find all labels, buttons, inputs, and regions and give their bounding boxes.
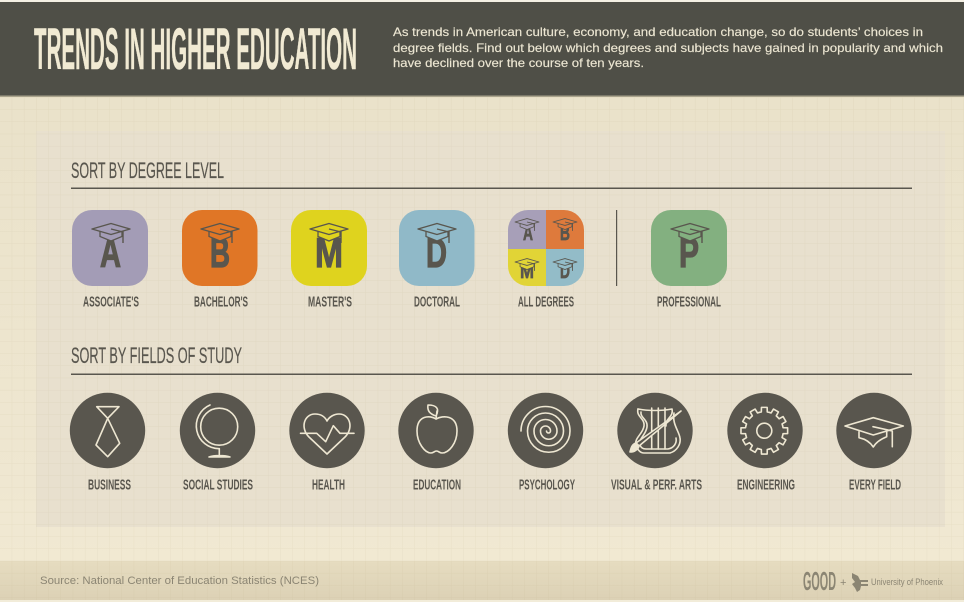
intro text bbox=[393, 26, 943, 70]
field: education (apple icon): EDUCATION bbox=[413, 478, 461, 494]
logos: + bbox=[840, 577, 846, 589]
field: every field (graduation cap icon) bbox=[836, 393, 912, 494]
intro text: have declined over the course of ten years. bbox=[393, 57, 644, 70]
tile: associate's: ASSOCIATE'S bbox=[83, 294, 139, 310]
tile: all degrees: B bbox=[560, 222, 570, 245]
tile: all degrees: M bbox=[520, 260, 534, 283]
field: psychology (spiral icon) bbox=[508, 393, 583, 494]
heading: sort by degree level: SORT BY DEGREE LEVEL bbox=[71, 158, 224, 183]
tile: all degrees: A bbox=[523, 222, 533, 245]
field: social studies (globe icon) bbox=[180, 393, 255, 494]
field: every field (graduation cap icon): EVERY FIELD bbox=[849, 478, 901, 494]
field: visual and performing arts (lyre and brush icon): VISUAL & PERF. ARTS bbox=[611, 478, 702, 494]
tile: bachelor's bbox=[182, 210, 258, 310]
footer band bbox=[0, 561, 964, 602]
field: business (tie icon): BUSINESS bbox=[88, 478, 131, 494]
field: health (heart icon) bbox=[289, 393, 365, 494]
field: social studies (globe icon): SOCIAL STUDIES bbox=[183, 478, 253, 494]
logos: University of Phoenix bbox=[871, 577, 943, 587]
intro text: degree fields. Find out below which degrees and subjects have gained in popularity and which bbox=[393, 42, 943, 55]
tile: doctoral bbox=[399, 210, 474, 310]
header band: TRENDS IN HIGHER EDUCATION bbox=[34, 17, 357, 82]
tile: professional: PROFESSIONAL bbox=[657, 294, 721, 310]
tile: all degrees bbox=[508, 210, 584, 310]
field: business (tie icon) bbox=[70, 393, 145, 494]
tile: professional bbox=[651, 210, 727, 310]
field: engineering (gear icon) bbox=[727, 393, 803, 494]
field: education (apple icon) bbox=[398, 393, 474, 494]
logos: GOOD bbox=[803, 566, 836, 596]
tile: master's bbox=[291, 210, 367, 310]
heading: sort by fields of study: SORT BY FIELDS OF STUDY bbox=[71, 343, 242, 368]
header band bbox=[0, 0, 964, 97]
tile: master's: M bbox=[315, 229, 343, 276]
field: psychology (spiral icon): PSYCHOLOGY bbox=[519, 478, 575, 494]
tile: master's: MASTER'S bbox=[308, 294, 352, 310]
source text: Source: National Center of Education Statistics (NCES) bbox=[40, 575, 319, 587]
intro text: As trends in American culture, economy, and education change, so do students’ choices in bbox=[393, 26, 923, 39]
tile: associate's: A bbox=[100, 229, 121, 276]
field: health (heart icon): HEALTH bbox=[312, 478, 345, 494]
field: engineering (gear icon): ENGINEERING bbox=[737, 478, 795, 494]
tile: doctoral: D bbox=[426, 229, 447, 276]
tile: associate's bbox=[72, 210, 148, 310]
tile: doctoral: DOCTORAL bbox=[414, 294, 460, 310]
logos bbox=[803, 566, 943, 596]
content panel bbox=[36, 131, 945, 527]
tile: all degrees: D bbox=[560, 260, 570, 283]
tile: bachelor's: B bbox=[210, 229, 230, 276]
field: visual and performing arts (lyre and brush icon) bbox=[611, 393, 702, 494]
tile: all degrees: ALL DEGREES bbox=[518, 294, 574, 310]
tile: bachelor's: BACHELOR'S bbox=[194, 294, 248, 310]
tile: professional: P bbox=[679, 229, 699, 276]
